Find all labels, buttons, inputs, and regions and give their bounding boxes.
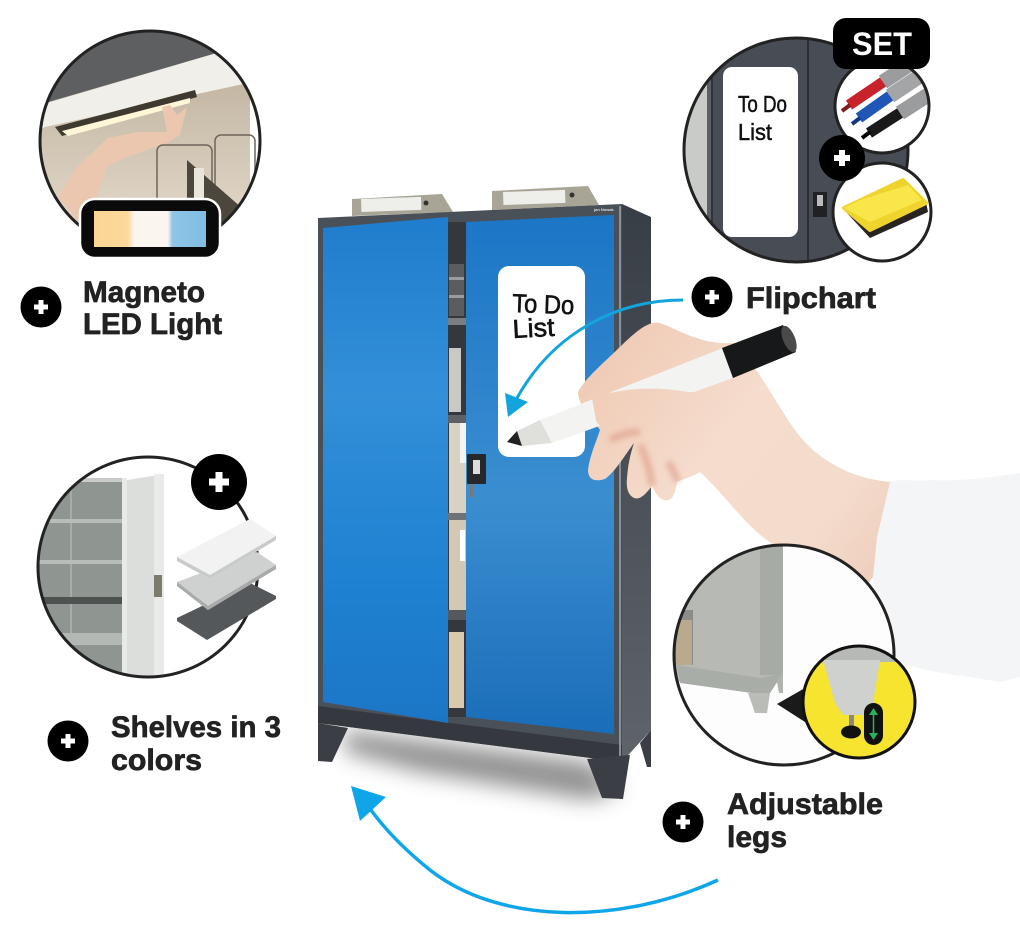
cabinet front frame <box>318 204 622 762</box>
whiteboard handwriting: List <box>738 119 773 145</box>
label: colors <box>111 744 202 777</box>
marker <box>507 324 800 446</box>
plus icon <box>662 802 704 842</box>
arrow: legs label to cabinet <box>351 786 718 913</box>
hand back <box>578 323 890 595</box>
whiteboard on door <box>498 266 585 457</box>
whiteboard handwriting <box>512 288 575 344</box>
whiteboard handwriting: To Do <box>738 91 787 117</box>
photo: cabinet door with whiteboard <box>683 37 909 263</box>
whiteboard handwriting <box>738 96 786 140</box>
whiteboard handwriting: List <box>512 312 556 344</box>
fingers over marker <box>592 380 770 472</box>
cabinet with binders on top <box>318 186 651 800</box>
panel: adjustable legs <box>662 540 920 854</box>
cabinet right side panel <box>622 204 651 762</box>
circle outline <box>684 38 908 262</box>
sleeve of shirt <box>873 473 1020 682</box>
floor shadow <box>345 730 620 800</box>
interior gap with shelves and binders <box>448 222 466 717</box>
plus icon <box>20 286 62 328</box>
label: Shelves in 3 <box>111 711 281 744</box>
right door <box>466 215 614 734</box>
SET badge: SET <box>852 26 912 62</box>
finger shading <box>610 432 677 486</box>
label: Flipchart <box>746 282 876 315</box>
plus icon <box>191 454 247 510</box>
label <box>83 276 222 341</box>
brand mark: jan Nowak <box>593 207 615 212</box>
hand holding marker <box>507 323 890 595</box>
panel: flipchart set <box>683 18 945 318</box>
plus icon <box>692 276 732 318</box>
photo: light under shelf <box>42 32 256 223</box>
circle outline <box>38 457 258 677</box>
SET badge <box>833 18 930 69</box>
label <box>111 711 281 777</box>
photo: open grey cabinet <box>40 474 164 676</box>
colour temperature badge <box>80 199 220 258</box>
height adjust arrows <box>864 703 883 745</box>
arrow: flipchart label to whiteboard <box>505 300 683 417</box>
binders on top <box>352 186 599 216</box>
yellow zoom inset <box>800 640 920 758</box>
plus icon between insets <box>819 135 865 181</box>
panel: shelves in 3 colors <box>37 454 281 777</box>
circle outline <box>674 545 894 765</box>
label: Magneto <box>83 276 205 309</box>
label: LED Light <box>83 308 222 341</box>
plus icon <box>48 720 88 762</box>
label: legs <box>727 821 787 854</box>
photo: cabinet foot <box>674 545 894 765</box>
pointer to foot <box>777 688 805 722</box>
shelf swatches <box>177 519 276 640</box>
whiteboard handwriting: To Do <box>512 288 575 320</box>
eraser inset <box>833 163 931 261</box>
panel: magneto LED light <box>20 30 262 341</box>
circle outline <box>40 31 260 251</box>
label: Adjustable <box>727 788 883 821</box>
door lock with key <box>467 454 486 497</box>
left door <box>323 217 448 723</box>
label <box>727 788 883 854</box>
marker set inset <box>834 69 930 154</box>
cabinet legs <box>318 723 651 799</box>
